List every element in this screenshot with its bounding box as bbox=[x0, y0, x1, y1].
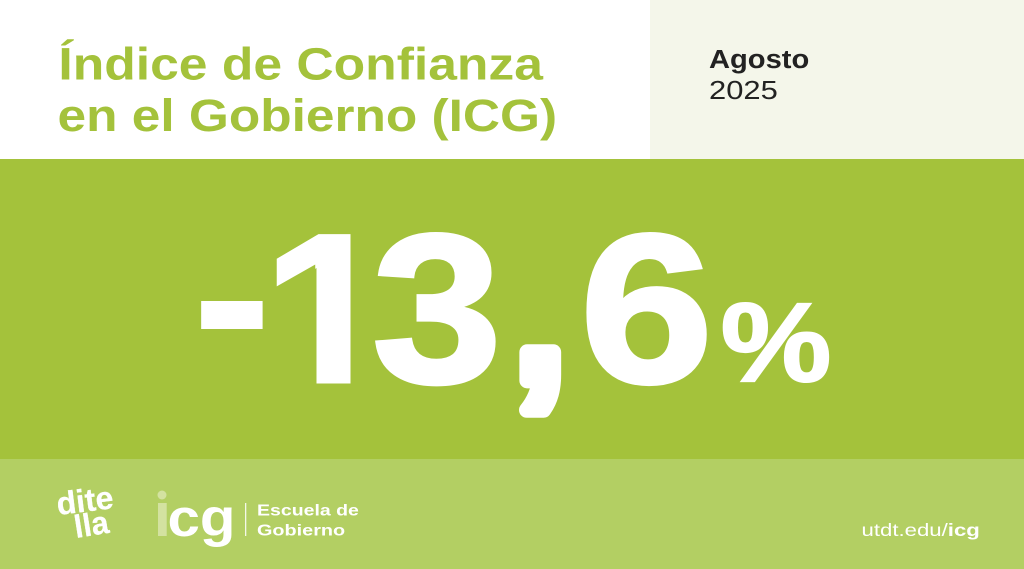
logo: ditella: lla bbox=[71, 503, 112, 545]
website url: utdt.edu/icg bbox=[862, 521, 980, 540]
title bbox=[58, 40, 557, 141]
title: Índice de Confianza bbox=[58, 40, 544, 90]
panel: footer band bbox=[0, 459, 1024, 569]
school name bbox=[257, 501, 359, 539]
main value: 6 bbox=[580, 190, 713, 427]
divider bbox=[245, 503, 246, 536]
date label: Agosto bbox=[709, 44, 809, 74]
date label bbox=[709, 44, 809, 105]
date label: 2025 bbox=[709, 76, 778, 105]
main value: % bbox=[721, 281, 831, 406]
logo: icg: cg bbox=[168, 488, 236, 547]
main value bbox=[201, 232, 830, 418]
main value: 3 bbox=[372, 191, 502, 428]
panel: date background bbox=[650, 0, 1024, 159]
logo: ditella: dite bbox=[54, 479, 115, 522]
main value: 1 bbox=[263, 191, 393, 428]
title: en el Gobierno (ICG) bbox=[58, 91, 557, 141]
logo: ditella bbox=[54, 479, 115, 545]
main value: , bbox=[514, 208, 566, 421]
school name: Escuela de bbox=[257, 501, 359, 519]
main value: - bbox=[192, 163, 272, 426]
school name: Gobierno bbox=[257, 521, 345, 539]
panel: main value band bbox=[0, 159, 1024, 459]
